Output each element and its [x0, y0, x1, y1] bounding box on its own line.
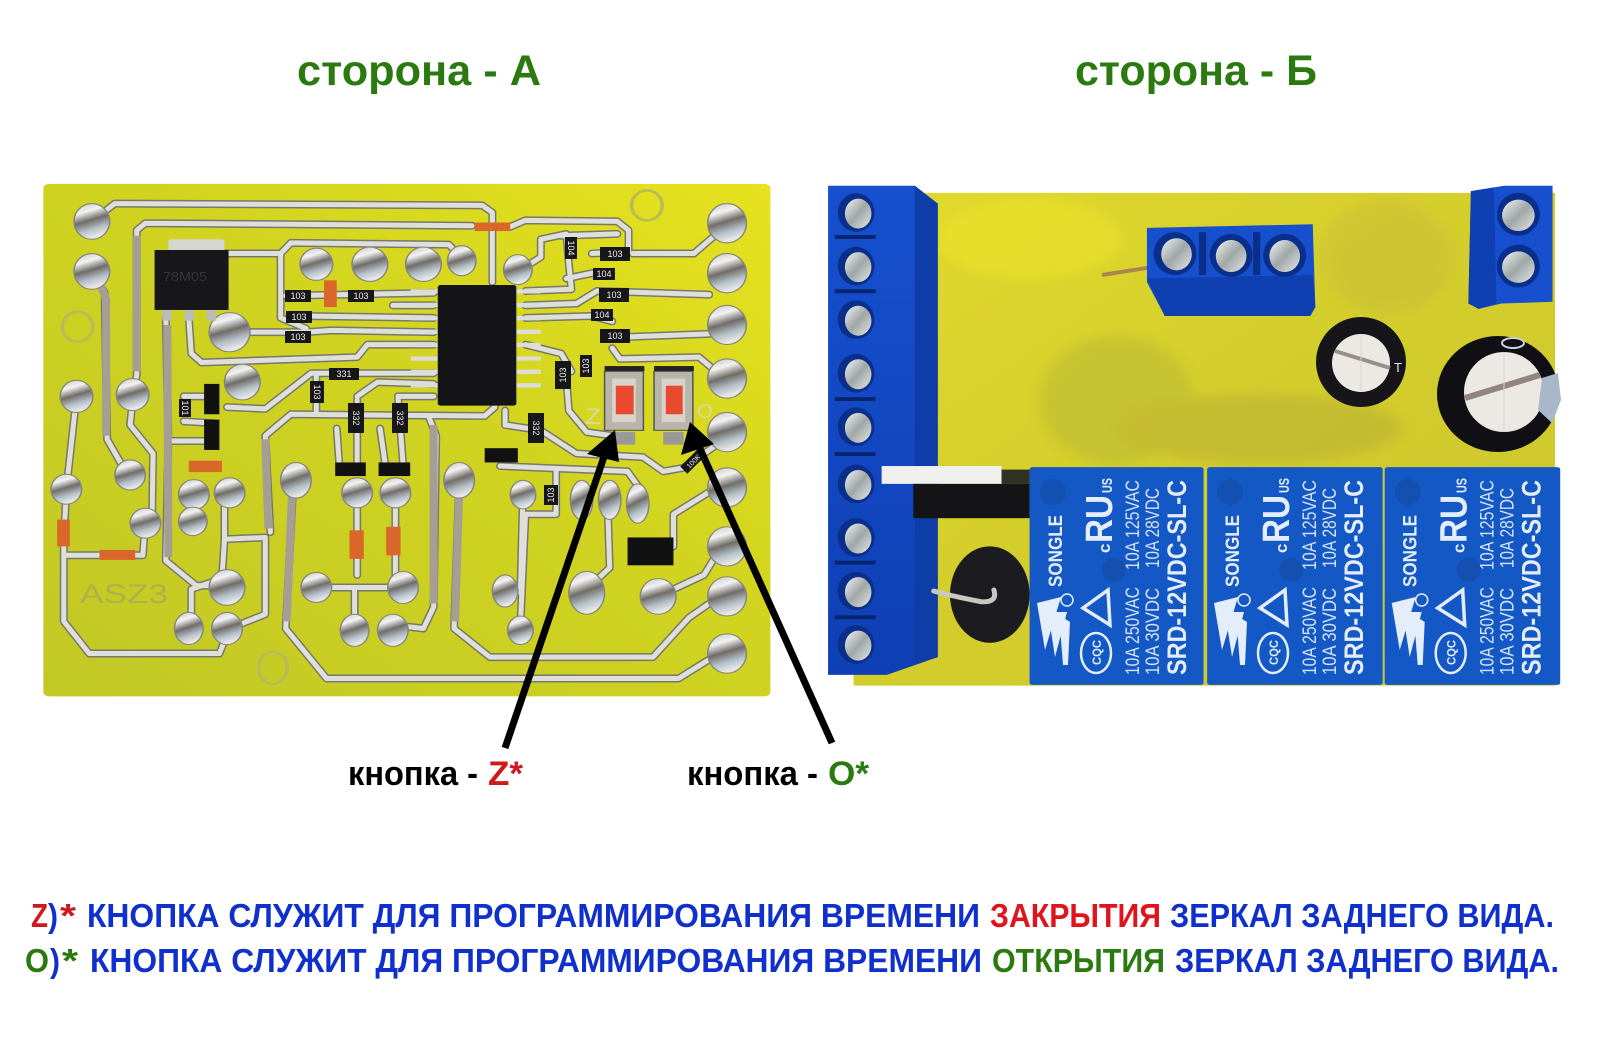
- title: side B: сторона - Б: [1075, 47, 1317, 95]
- relay 1: CQC: [1090, 640, 1104, 665]
- relay 1: SONGLE: [1046, 515, 1067, 587]
- silkscreen and SMD labels: 103: [606, 290, 622, 300]
- silkscreen and SMD labels: 103: [290, 291, 306, 301]
- relay 1: US: [1099, 478, 1116, 493]
- relay 1: 10A 30VDC: [1143, 588, 1164, 675]
- note: O button description: ОТКРЫТИЯ: [992, 942, 1165, 979]
- capacitor: large: [1437, 336, 1561, 452]
- relay 2: 10A 125VAC: [1300, 480, 1321, 570]
- silkscreen and SMD labels: 103: [291, 312, 307, 322]
- silkscreen and SMD labels: [80, 237, 713, 609]
- silkscreen and SMD labels: 101: [180, 400, 190, 416]
- silkscreen and SMD labels: ASZ3: [80, 579, 168, 609]
- silkscreen and SMD labels: 103: [353, 291, 369, 301]
- label: button O: О*: [828, 755, 870, 793]
- relay 1: 10A 250VAC: [1123, 587, 1144, 675]
- relay 1: c: [1095, 544, 1114, 553]
- glass diodes: [57, 222, 510, 560]
- relay 3: 10A 28VDC: [1498, 488, 1519, 568]
- note: Z button description: *: [60, 897, 76, 934]
- silkscreen and SMD labels: 103: [312, 384, 322, 400]
- panel: circuit board side B: [828, 186, 1561, 686]
- relay 2: RU: [1256, 495, 1298, 543]
- note: O button description: КНОПКА СЛУЖИТ ДЛЯ ПРОГРАММИРОВАНИЯ ВРЕМЕНИ: [90, 942, 982, 979]
- relay 2: 10A 28VDC: [1320, 488, 1341, 568]
- board shading: [938, 200, 1453, 464]
- relay 3: RU: [1434, 495, 1476, 543]
- buzzer: [934, 546, 1030, 643]
- button Z: [605, 366, 644, 445]
- note: Z button description: КНОПКА СЛУЖИТ ДЛЯ ПРОГРАММИРОВАНИЯ ВРЕМЕНИ: [87, 897, 980, 934]
- silkscreen and SMD labels: 103: [546, 487, 556, 503]
- silkscreen and SMD labels: 331: [336, 369, 352, 379]
- relay 3: 10A 125VAC: [1478, 480, 1499, 570]
- relay 3: [1392, 478, 1547, 675]
- arrow: to button O: [681, 422, 832, 743]
- silkscreen and SMD labels: 103: [607, 249, 623, 259]
- relay 3: CQC: [1445, 640, 1459, 665]
- relay 2: 10A 250VAC: [1300, 587, 1321, 675]
- note: Z button description: [31, 897, 1554, 934]
- silkscreen and SMD labels: 104: [596, 269, 612, 279]
- relay 1: [1037, 478, 1192, 675]
- silkscreen and SMD labels: 100K: [686, 454, 703, 470]
- label: button Z: кнопка -: [348, 755, 478, 793]
- relay 2: SONGLE: [1223, 515, 1244, 587]
- title: side A: сторона - А: [297, 47, 541, 95]
- small transistors: [204, 384, 673, 565]
- wire lead: [1102, 267, 1152, 275]
- label: button Z: Z*: [488, 755, 524, 793]
- panel: circuit board side A: [43, 184, 770, 696]
- silkscreen and SMD labels: 332: [351, 410, 361, 426]
- arrow: to button Z: [505, 430, 619, 748]
- silkscreen and SMD labels: 103: [290, 332, 306, 342]
- note: O button description: ): [50, 942, 60, 979]
- relay 2: US: [1276, 478, 1293, 493]
- thick grey traces: [101, 236, 459, 621]
- button O: [654, 366, 694, 445]
- microcontroller chip: [438, 285, 516, 406]
- note: Z button description: ЗАКРЫТИЯ: [990, 897, 1161, 934]
- capacitor: small: [1316, 317, 1406, 407]
- relay 1: 10A 125VAC: [1123, 480, 1144, 570]
- silkscreen and SMD labels: 103: [558, 367, 568, 383]
- note: Z button description: Z: [31, 897, 48, 934]
- mounting holes: [62, 190, 662, 684]
- terminal block: 3-way: [1147, 224, 1315, 316]
- relay bodies: [1030, 467, 1560, 685]
- silkscreen and SMD labels: 103: [607, 331, 623, 341]
- relay 3: SONGLE: [1401, 515, 1422, 587]
- note: O button description: [25, 942, 1559, 979]
- board substrate A: [43, 184, 770, 696]
- relay 3: SRD-12VDC-SL-C: [1517, 480, 1547, 675]
- power transistor: [882, 466, 1030, 518]
- terminal block: 2-way: [1468, 186, 1553, 309]
- IC pins: [411, 289, 541, 387]
- relay 1: RU: [1079, 495, 1121, 543]
- silkscreen and SMD labels: 332: [395, 410, 405, 426]
- voltage regulator: [155, 239, 229, 321]
- relay 3: 10A 250VAC: [1478, 587, 1499, 675]
- relay 3: 10A 30VDC: [1498, 588, 1519, 675]
- note: O button description: ЗЕРКАЛ ЗАДНЕГО ВИДА.: [1175, 942, 1559, 979]
- relay 1: 10A 28VDC: [1143, 488, 1164, 568]
- copper traces: [64, 204, 727, 679]
- relay 2: CQC: [1267, 640, 1281, 665]
- note: Z button description: ): [48, 897, 58, 934]
- note: O button description: *: [62, 942, 78, 979]
- solder pads: [51, 204, 746, 673]
- silkscreen and SMD labels: 104: [566, 240, 576, 256]
- silkscreen and SMD labels: 104: [594, 310, 610, 320]
- relay 2: SRD-12VDC-SL-C: [1339, 480, 1369, 675]
- relay 3: c: [1450, 544, 1469, 553]
- terminal block: 9-way: [828, 186, 938, 675]
- relay 1: SRD-12VDC-SL-C: [1162, 480, 1192, 675]
- note: O button description: О: [25, 942, 49, 979]
- relay 3: US: [1454, 478, 1471, 493]
- silkscreen and SMD labels: 103: [581, 358, 591, 374]
- board substrate B: [854, 193, 1555, 686]
- silkscreen and SMD labels: O: [697, 401, 713, 423]
- silkscreen and SMD labels: 78M05: [163, 269, 207, 284]
- relay 2: c: [1272, 544, 1291, 553]
- note: Z button description: ЗЕРКАЛ ЗАДНЕГО ВИДА.: [1170, 897, 1554, 934]
- silkscreen and SMD labels: Z: [585, 404, 601, 429]
- silkscreen and SMD labels: 332: [531, 420, 541, 436]
- relay 2: [1214, 478, 1369, 675]
- relay 2: 10A 30VDC: [1320, 588, 1341, 675]
- label: button O: кнопка -: [687, 755, 818, 793]
- capacitor: small: T: [1394, 360, 1402, 375]
